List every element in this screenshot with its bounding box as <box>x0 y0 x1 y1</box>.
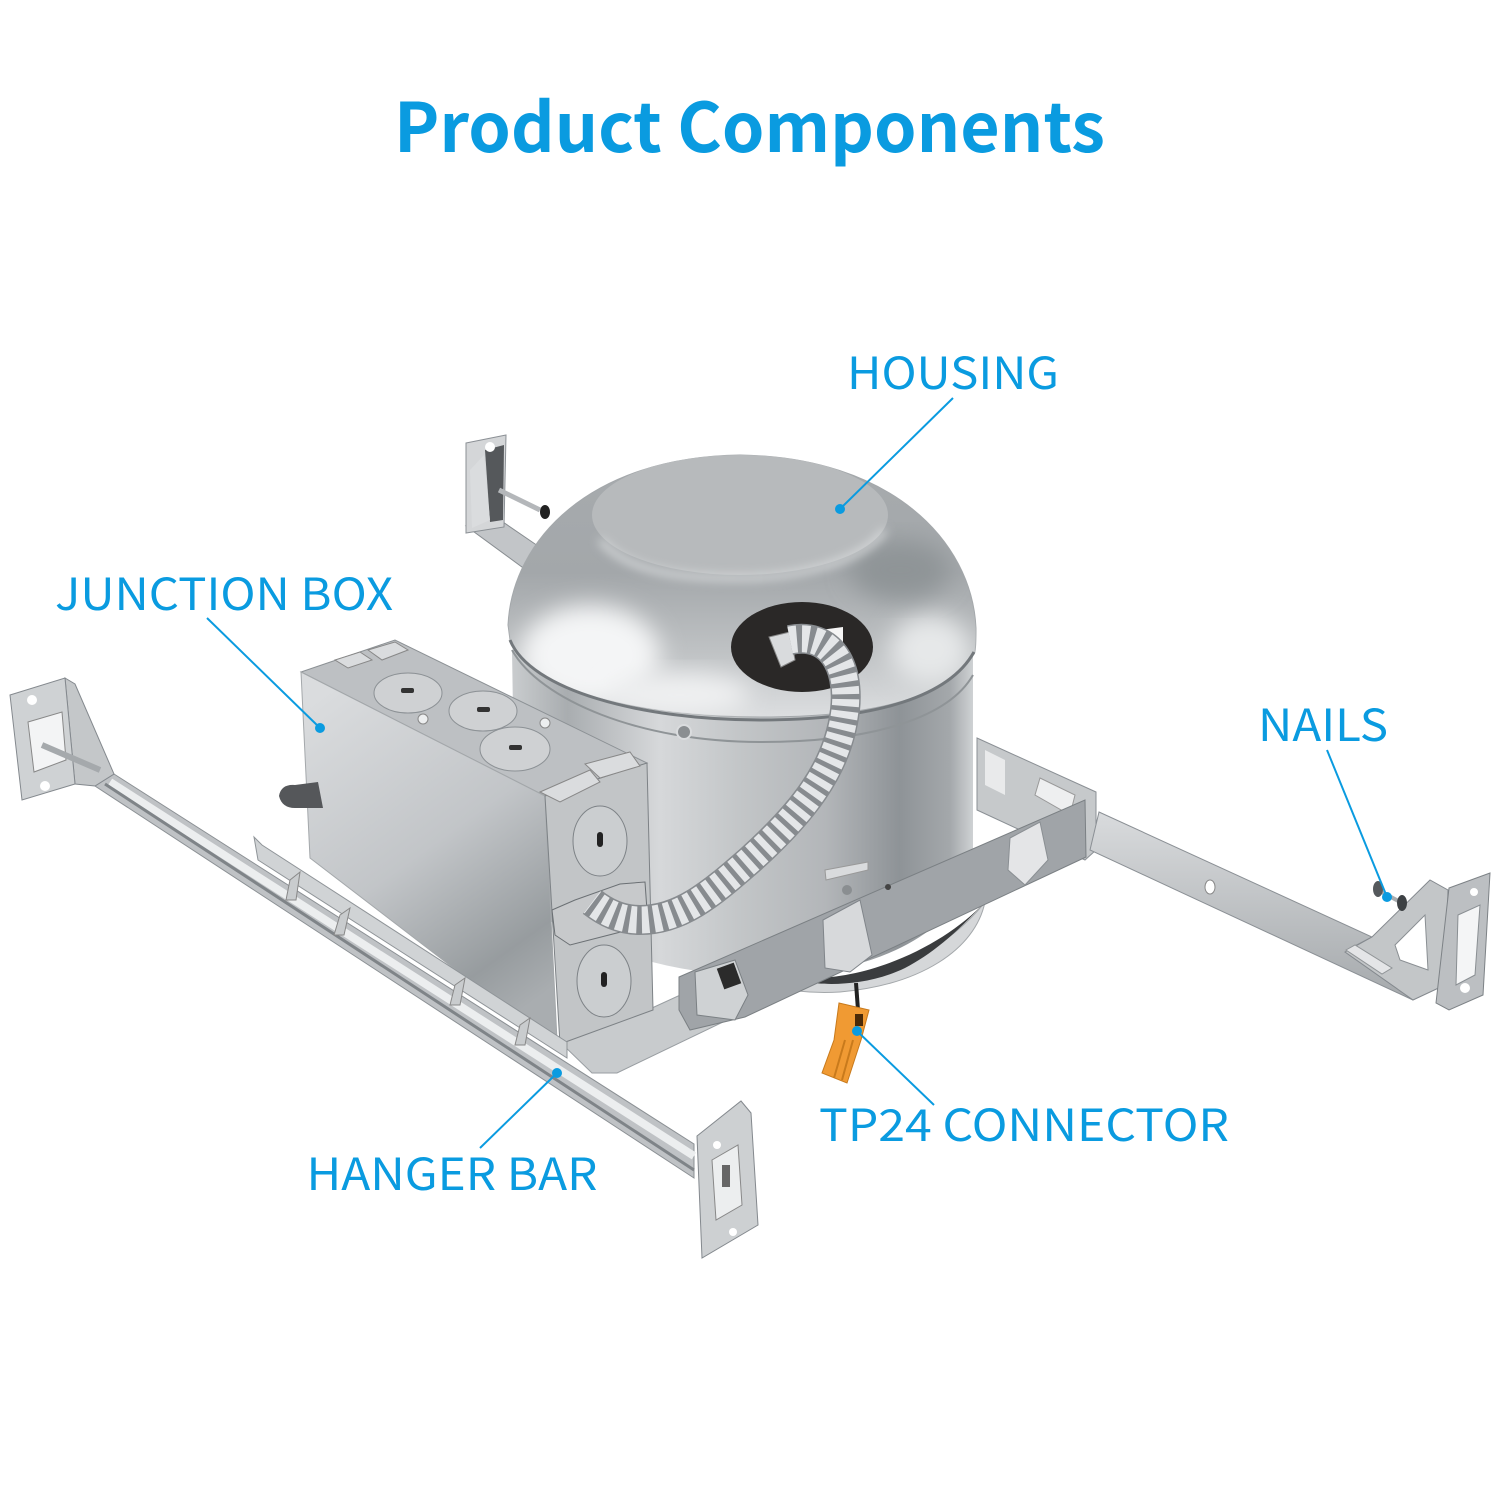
trim ring under housing <box>770 902 985 993</box>
label: junction box: JUNCTION BOX <box>55 559 393 623</box>
label: TP24 connector: TP24 CONNECTOR <box>819 1090 1229 1154</box>
product illustration: recessed housing <box>10 435 1490 1258</box>
housing dome <box>508 455 976 742</box>
left hanger bar <box>95 774 694 1178</box>
label: junction box <box>55 559 393 733</box>
junction box <box>279 640 653 1044</box>
label: housing <box>835 338 1059 514</box>
label: nails: NAILS <box>1258 690 1388 754</box>
front bracket <box>697 1101 758 1258</box>
right bracket <box>1345 873 1490 1010</box>
spring clip <box>279 782 323 808</box>
black gasket and clamp <box>731 602 873 692</box>
knockouts top <box>374 673 442 713</box>
left bracket <box>10 678 114 800</box>
title: Product Components <box>394 73 1105 172</box>
label: TP24 connector <box>819 1026 1229 1154</box>
knockouts front <box>573 806 627 876</box>
label: housing: HOUSING <box>847 338 1059 402</box>
label: nails <box>1258 690 1392 902</box>
flexible conduit <box>592 639 846 920</box>
corner tabs <box>540 770 600 802</box>
housing cylinder <box>512 650 973 976</box>
bottom plate <box>560 940 800 1073</box>
label: hanger bar <box>306 1068 598 1203</box>
conduit clamp <box>552 882 648 945</box>
back hanger bracket <box>466 435 550 570</box>
mounting strap <box>679 800 1086 1030</box>
TP24 connector <box>822 983 869 1083</box>
label: hanger bar: HANGER BAR <box>306 1139 598 1203</box>
right frame and hanger bar <box>977 738 1413 1000</box>
nails <box>1373 881 1407 911</box>
